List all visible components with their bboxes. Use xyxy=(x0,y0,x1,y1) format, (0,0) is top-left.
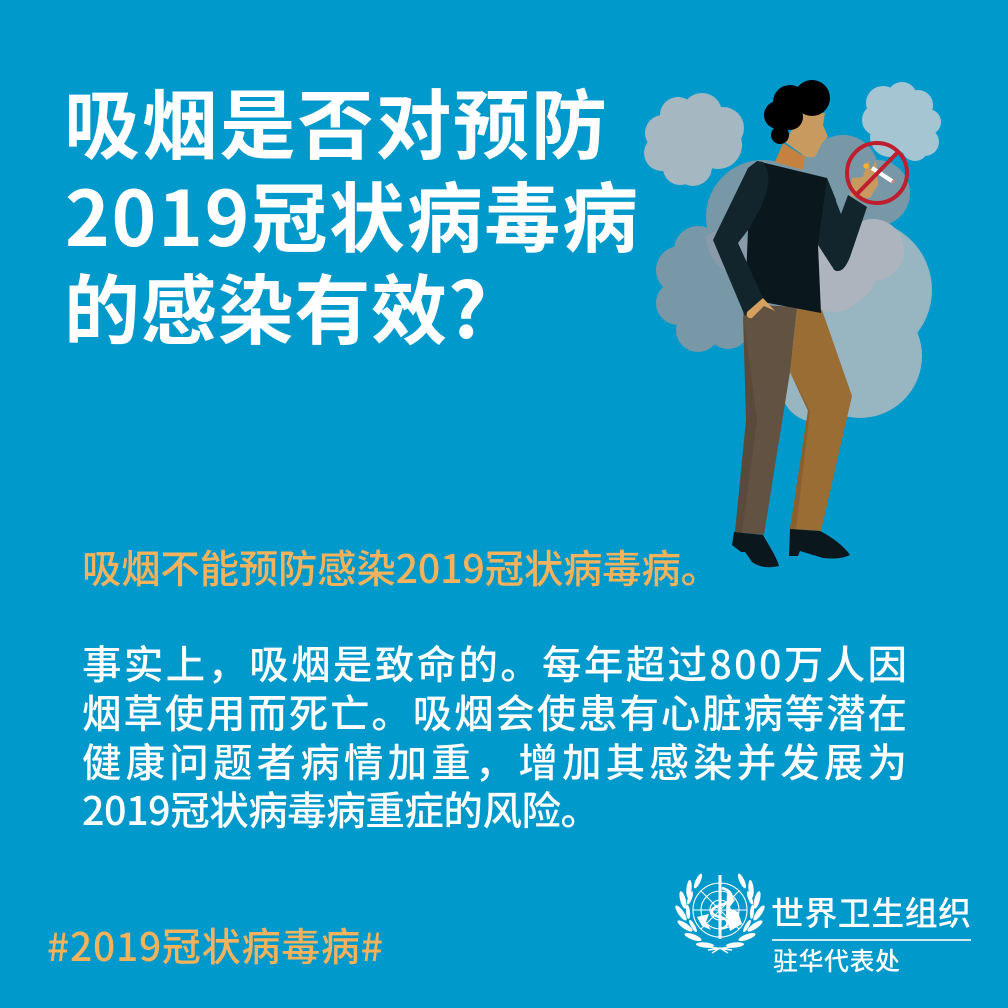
torso: dark sweater xyxy=(745,161,836,313)
globe xyxy=(693,883,747,937)
body text xyxy=(82,634,907,837)
no smoking symbol xyxy=(847,143,907,203)
staff xyxy=(718,875,722,939)
man's back leg: tan trousers xyxy=(790,307,852,531)
cloud: upper right smoke xyxy=(862,82,941,161)
organisation name: 世界卫生组织 xyxy=(771,887,971,935)
left arm xyxy=(713,161,768,316)
face xyxy=(785,112,828,157)
serpent xyxy=(712,888,731,929)
hair xyxy=(764,80,830,144)
continents xyxy=(697,892,742,931)
hand in pocket xyxy=(747,298,775,318)
left shoe xyxy=(732,532,779,567)
man's front leg: brown trousers xyxy=(735,304,797,535)
smoking hand xyxy=(850,160,878,198)
lit cigarette xyxy=(863,163,894,182)
hashtag: #2019冠状病毒病# xyxy=(47,917,383,973)
illustration: man smoking surrounded by smoke xyxy=(644,80,941,567)
title: 的感染有效? xyxy=(64,250,487,360)
office name: 驻华代表处 xyxy=(773,942,900,978)
wreath: right leaves xyxy=(726,873,766,948)
body text: 2019冠状病毒病重症的风险。 xyxy=(82,780,600,837)
body text: 烟草使用而死亡。吸烟会使患有心脏病等潜在 xyxy=(82,683,907,740)
cloud: back dark smoke xyxy=(656,135,910,352)
right arm raised xyxy=(818,178,867,271)
body text: 事实上，吸烟是致命的。每年超过800万人因 xyxy=(82,634,907,691)
neck xyxy=(775,143,805,170)
WHO emblem xyxy=(674,873,766,953)
cloud: lower right light smoke xyxy=(780,220,932,422)
body text: 健康问题者病情加重，增加其感染并发展为 xyxy=(82,732,907,789)
cloud: upper left smoke xyxy=(644,93,744,186)
right shoe xyxy=(789,529,850,559)
title: 吸烟是否对预防 xyxy=(64,65,607,175)
logo divider xyxy=(772,939,971,941)
wreath: left leaves xyxy=(674,873,714,948)
WHO logo xyxy=(674,873,971,978)
title xyxy=(64,65,638,360)
cloud: overlap grey smoke xyxy=(706,219,904,312)
answer headline: 吸烟不能预防感染2019冠状病毒病。 xyxy=(82,538,720,595)
title: 2019冠状病毒病 xyxy=(65,158,638,268)
